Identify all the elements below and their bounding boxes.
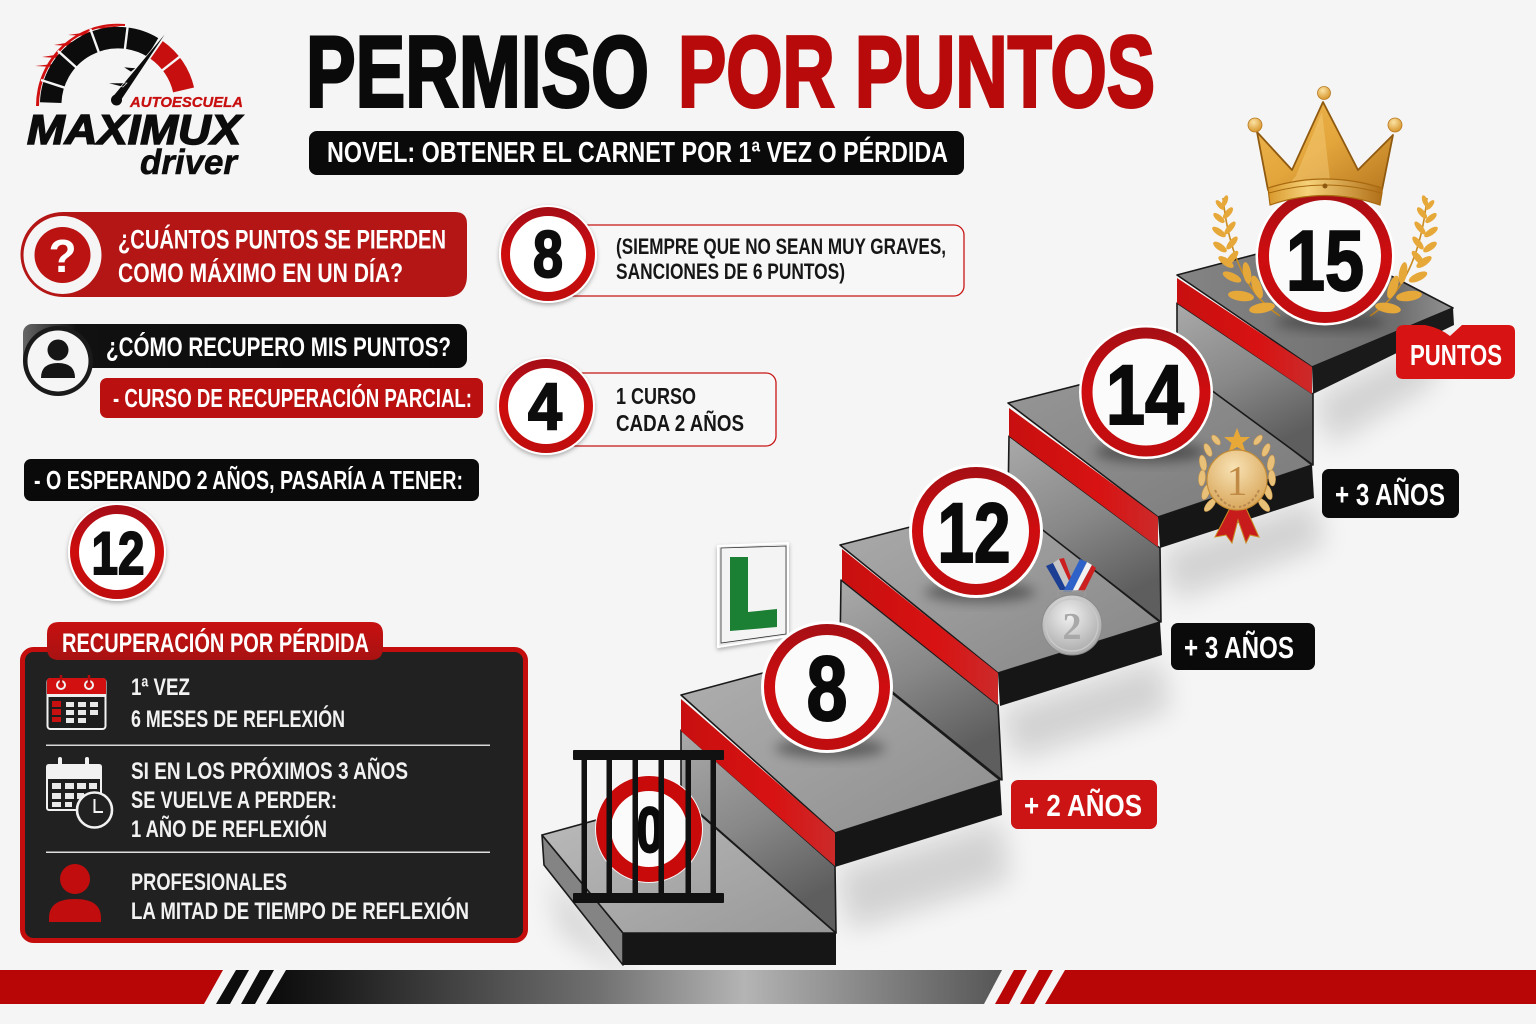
recover banner xyxy=(23,324,467,368)
question text: COMO MÁXIMO EN UN DÍA? xyxy=(118,257,403,288)
tag: puntos: PUNTOS xyxy=(1410,340,1502,372)
logo: Autoescuela Maximux Driver xyxy=(27,24,244,182)
panel tab xyxy=(47,622,383,660)
gold medal star xyxy=(1224,428,1250,452)
staircase xyxy=(542,238,1454,985)
zero badge xyxy=(595,775,703,883)
logo needle pivot xyxy=(111,94,122,106)
step 0 xyxy=(542,797,836,965)
silver medal xyxy=(1042,558,1102,655)
repeat loss text: 1 AÑO DE REFLEXIÓN xyxy=(131,815,327,843)
badge: 12 stair xyxy=(909,464,1043,602)
partial recovery course label: - CURSO DE RECUPERACIÓN PARCIAL: xyxy=(113,383,472,413)
answer text: (SIEMPRE QUE NO SEAN MUY GRAVES, xyxy=(616,234,946,259)
staircase cast shadows xyxy=(550,330,1450,985)
crown stud xyxy=(1322,184,1328,188)
badge: 8 stair xyxy=(761,621,893,758)
badge: 8 stair: 8 xyxy=(806,638,848,740)
tag: +2 años: + 2 AÑOS xyxy=(1024,788,1142,823)
answer box xyxy=(560,225,964,296)
badge: 12 stair: 12 xyxy=(938,486,1010,580)
answer text xyxy=(616,234,946,284)
icon: professional person xyxy=(49,864,101,922)
panel body xyxy=(22,650,526,940)
repeat loss text: SE VUELVE A PERDER: xyxy=(131,787,337,814)
tag: +2 años xyxy=(1011,780,1157,829)
crown balls xyxy=(1248,86,1402,132)
badge: 12 small xyxy=(68,503,166,601)
step 1 xyxy=(681,652,1002,933)
step 4 xyxy=(1177,238,1454,465)
professionals text xyxy=(131,869,469,925)
logo driver: driver xyxy=(140,143,239,182)
professionals text: PROFESIONALES xyxy=(131,869,287,896)
logo needle xyxy=(107,30,168,102)
icon: question mark: ? xyxy=(48,230,77,282)
title black word: PERMISO xyxy=(306,16,649,128)
course text: CADA 2 AÑOS xyxy=(616,409,744,436)
gold medal laurels xyxy=(1198,433,1276,513)
first time text: 1ª VEZ xyxy=(131,674,190,701)
title red words: POR PUNTOS xyxy=(678,16,1155,128)
answer text: SANCIONES DE 6 PUNTOS) xyxy=(616,259,845,284)
green L xyxy=(730,557,777,631)
badge: 8 xyxy=(499,205,597,303)
laurels around 15 xyxy=(1211,194,1439,316)
tag: +3 años top xyxy=(1322,469,1459,518)
logo gauge arc xyxy=(41,25,184,103)
tag: +3 años middle xyxy=(1171,623,1315,670)
step 3 xyxy=(1008,360,1314,622)
tag: puntos xyxy=(1396,325,1515,379)
badge: 4: 4 xyxy=(528,369,562,443)
question text: ¿CUÁNTOS PUNTOS SE PIERDEN xyxy=(118,224,446,254)
subtitle bar xyxy=(309,131,964,175)
gold medal xyxy=(1198,428,1276,543)
zero badge: 0 xyxy=(636,794,664,866)
first time text: 6 MESES DE REFLEXIÓN xyxy=(131,705,345,733)
icon: user xyxy=(23,326,93,396)
badge: 0 behind bars xyxy=(573,750,724,903)
subtitle bar: NOVEL: OBTENER EL CARNET POR 1ª VEZ O PÉRDIDA xyxy=(327,135,948,169)
wait two years label xyxy=(24,459,479,501)
recover points heading xyxy=(23,324,467,396)
answer callout: 4 points xyxy=(497,357,776,455)
crown body xyxy=(1257,102,1393,190)
icon: question mark xyxy=(24,216,102,294)
first time text xyxy=(131,674,345,733)
logo maximux: MAXIMUX xyxy=(27,106,244,153)
icon: calendar red xyxy=(47,675,106,729)
gold medal ribbon xyxy=(1215,508,1259,543)
gold medal disc: 1 xyxy=(1226,459,1248,505)
badge: 8: 8 xyxy=(533,217,563,291)
panel: recuperacion por perdida xyxy=(22,622,526,940)
silver medal ribbon xyxy=(1046,558,1096,597)
silver medal disc: 2 xyxy=(1062,606,1082,648)
question banner xyxy=(21,212,467,297)
badge: 15 top: 15 xyxy=(1286,214,1364,309)
question: max points lost per day xyxy=(21,212,467,297)
badge: 14 stair: 14 xyxy=(1106,348,1184,442)
tag: +3 años top: + 3 AÑOS xyxy=(1335,477,1445,512)
tag: +3 años middle: + 3 AÑOS xyxy=(1184,630,1294,665)
panel tab: RECUPERACIÓN POR PÉRDIDA xyxy=(62,627,369,658)
course text: 1 CURSO xyxy=(616,383,696,409)
wait two years label: - O ESPERANDO 2 AÑOS, PASARÍA A TENER: xyxy=(34,465,463,495)
icon: crown xyxy=(1248,86,1402,205)
badge: 12 small: 12 xyxy=(92,520,144,587)
jail bars xyxy=(573,750,724,903)
repeat loss text xyxy=(131,757,408,843)
logo autoescuela: AUTOESCUELA xyxy=(129,94,243,111)
course box xyxy=(560,373,776,446)
crown highlight xyxy=(1287,112,1330,186)
crown band line xyxy=(1269,185,1381,193)
crown band xyxy=(1268,179,1382,205)
badge: 15 top xyxy=(1256,186,1394,330)
L plate xyxy=(718,543,788,647)
answer callout: 8 points xyxy=(499,205,964,303)
icon: calendar with clock xyxy=(46,759,112,828)
partial recovery course label xyxy=(100,378,483,418)
step 2 xyxy=(840,502,1162,780)
badge: 14 stair xyxy=(1079,325,1213,462)
professionals text: LA MITAD DE TIEMPO DE REFLEXIÓN xyxy=(131,897,469,925)
question text xyxy=(118,224,446,288)
footer band xyxy=(0,970,1536,1004)
logo speed streaks xyxy=(35,24,125,106)
repeat loss text: SI EN LOS PRÓXIMOS 3 AÑOS xyxy=(131,757,408,785)
course text xyxy=(616,383,744,436)
title xyxy=(306,16,1155,128)
recover text: ¿CÓMO RECUPERO MIS PUNTOS? xyxy=(106,331,451,362)
badge: 4 xyxy=(497,357,595,455)
